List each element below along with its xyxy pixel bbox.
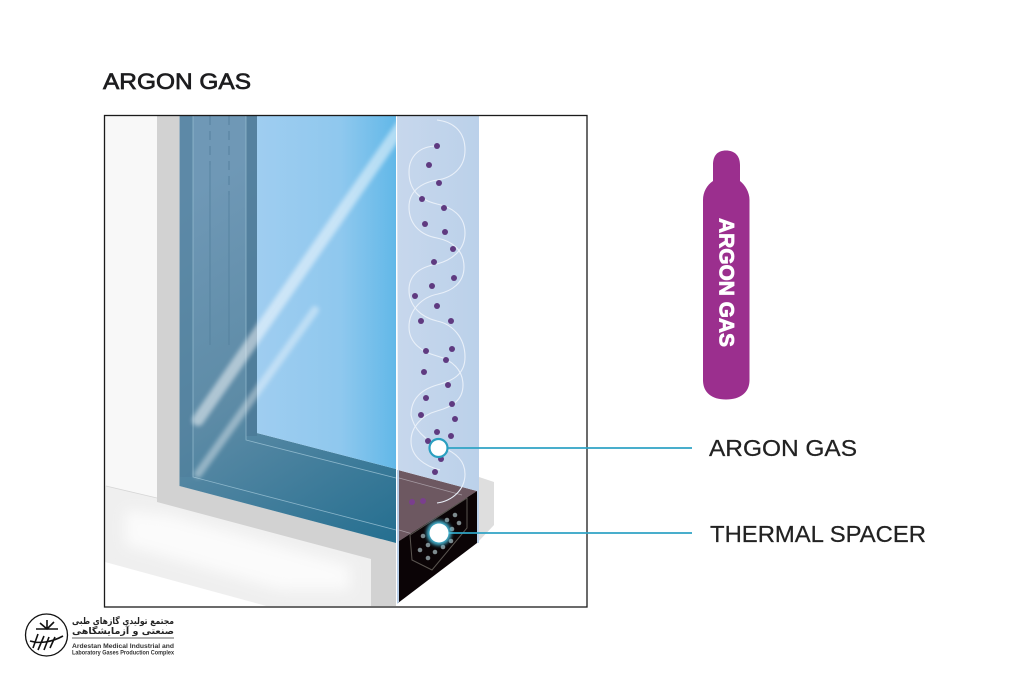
icon: argon cylinder: ARGON GAS [714,218,738,347]
window sill [105,486,372,607]
window diagram [105,116,494,607]
reflections [198,125,402,474]
sill highlight [128,515,346,586]
logo persian name: مجتمع تولیدی گازهای طبی [72,615,174,627]
logo: Laboratory Gases Production Complex [72,650,174,656]
logo [26,614,174,656]
side bands [180,116,257,438]
dark blue insulated edge [180,116,396,543]
callout: argon gas: ARGON GAS [709,435,857,461]
title: ARGON GAS [103,69,251,94]
argon gas particles [409,143,458,505]
spacer lines [193,116,396,530]
logo persian subtitle: صنعتی و آزمایشگاهی [72,625,174,637]
glass pane [257,116,396,469]
callout: thermal spacer [426,520,926,547]
spacer octagon outline [410,498,467,570]
callout: thermal spacer: THERMAL SPACER [710,521,926,547]
faint lines on top [399,478,462,535]
spacer block: black face [398,491,477,603]
sill edge line [106,486,157,498]
grey frame [157,116,396,607]
icon: argon cylinder [703,150,750,400]
logo english name: Ardestan Medical Industrial and [72,643,174,650]
desiccant dots [418,513,461,560]
spacer block: side face [477,477,494,543]
spacer block: brown top [398,470,477,541]
callout: argon gas [430,435,857,461]
pane edge strip [397,470,399,604]
wall [105,116,402,607]
wave lines [409,120,465,503]
outer glass pane [397,116,479,543]
diagram border [104,116,587,607]
logo emblem [26,614,68,656]
